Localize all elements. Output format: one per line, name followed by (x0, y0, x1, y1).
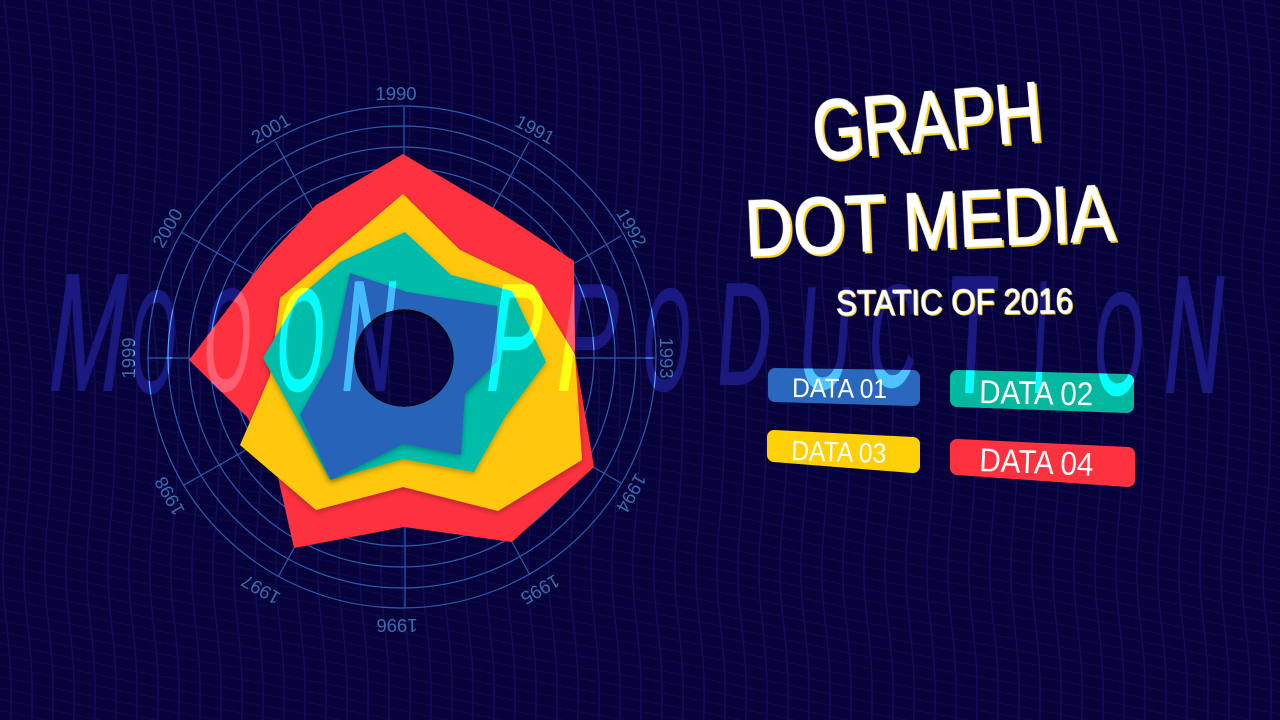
year labels: 1994 (612, 470, 651, 516)
year labels: 1991 (512, 110, 558, 148)
watermark base layer: O (638, 259, 697, 421)
legend labels (791, 373, 1094, 483)
watermark: MOOON PPODUCTION, glow layer: I (1028, 249, 1054, 427)
label: data 04: DATA 04 (979, 441, 1094, 483)
year labels: 1998 (150, 473, 189, 519)
watermark base layer: O (1090, 262, 1149, 425)
radar chart (189, 154, 594, 548)
watermark base layer: P (477, 252, 555, 422)
pill: data 01 (775, 375, 913, 399)
watermark: MOOON PPODUCTION, glow layer: P (547, 252, 631, 423)
label: data 01: DATA 01 (792, 373, 887, 404)
title: DOT MEDIA: DOT MEDIA (743, 168, 1117, 273)
year labels: 1993 (656, 337, 677, 379)
watermark base layer: N (1156, 241, 1234, 427)
watermark base layer: O (199, 259, 258, 421)
watermark: MOOON PPODUCTION, glow layer: O (126, 262, 182, 423)
watermark: MOOON PPODUCTION, glow layer: M (39, 239, 140, 426)
label: data 03: DATA 03 (791, 435, 887, 469)
series: data 01 blue (300, 273, 497, 480)
watermark base layer: U (794, 258, 857, 420)
watermark: MOOON PPODUCTION, glow layer: O (199, 259, 258, 421)
label: data 02: DATA 02 (979, 373, 1094, 412)
watermark: MOOON PPODUCTION, glow layer: T (943, 242, 1002, 428)
watermark base layer: I (1028, 249, 1054, 427)
watermark base layer: C (864, 255, 923, 417)
radar grid: rings and spokes (147, 106, 656, 608)
pill: data 03 (774, 437, 913, 466)
watermark: MOOON PPODUCTION, glow layer: O (638, 259, 697, 421)
watermark base layer: O (126, 262, 182, 423)
year labels: 1992 (612, 205, 651, 251)
watermark: MOOON PPODUCTION, glow layer: D (712, 253, 778, 415)
legend pills (774, 375, 1128, 480)
year labels: 1997 (238, 570, 284, 609)
year labels (118, 83, 677, 636)
year labels: 2000 (148, 205, 187, 251)
watermark: MOOON PPODUCTION, glow layer (39, 239, 1234, 428)
watermark: MOOON PPODUCTION, glow layer: N (335, 248, 405, 423)
pill: data 02 (957, 377, 1127, 406)
watermark base layer: N (335, 248, 405, 423)
watermark: MOOON PPODUCTION, glow layer: N (1156, 241, 1234, 427)
year labels: 1999 (118, 337, 139, 379)
watermark: MOOON PPODUCTION, glow layer: U (794, 258, 857, 420)
subtitle: STATIC OF 2016 (836, 282, 1073, 323)
watermark base layer: O (272, 259, 331, 421)
title: GRAPH: GRAPH (808, 64, 1046, 178)
watermark: MOOON PPODUCTION, glow layer: O (1090, 262, 1149, 425)
year labels: 1996 (376, 615, 418, 636)
series: data 03 yellow (240, 194, 582, 511)
series: data 02 teal (263, 232, 546, 480)
watermark base layer: P (547, 252, 631, 423)
watermark: MOOON PPODUCTION, glow layer: O (272, 259, 331, 421)
pill: data 04 (957, 446, 1128, 480)
year labels: 1995 (517, 570, 563, 609)
watermark: MOOON PPODUCTION, glow layer: P (477, 252, 555, 422)
series: data 04 red (189, 154, 594, 548)
year labels: 1990 (375, 83, 417, 104)
watermark base layer (39, 239, 1234, 428)
watermark base layer: T (943, 242, 1002, 428)
watermark base layer: M (39, 239, 140, 426)
year labels: 2001 (248, 109, 294, 148)
watermark: MOOON PPODUCTION, glow layer: C (864, 255, 923, 417)
watermark base layer: D (712, 253, 778, 415)
